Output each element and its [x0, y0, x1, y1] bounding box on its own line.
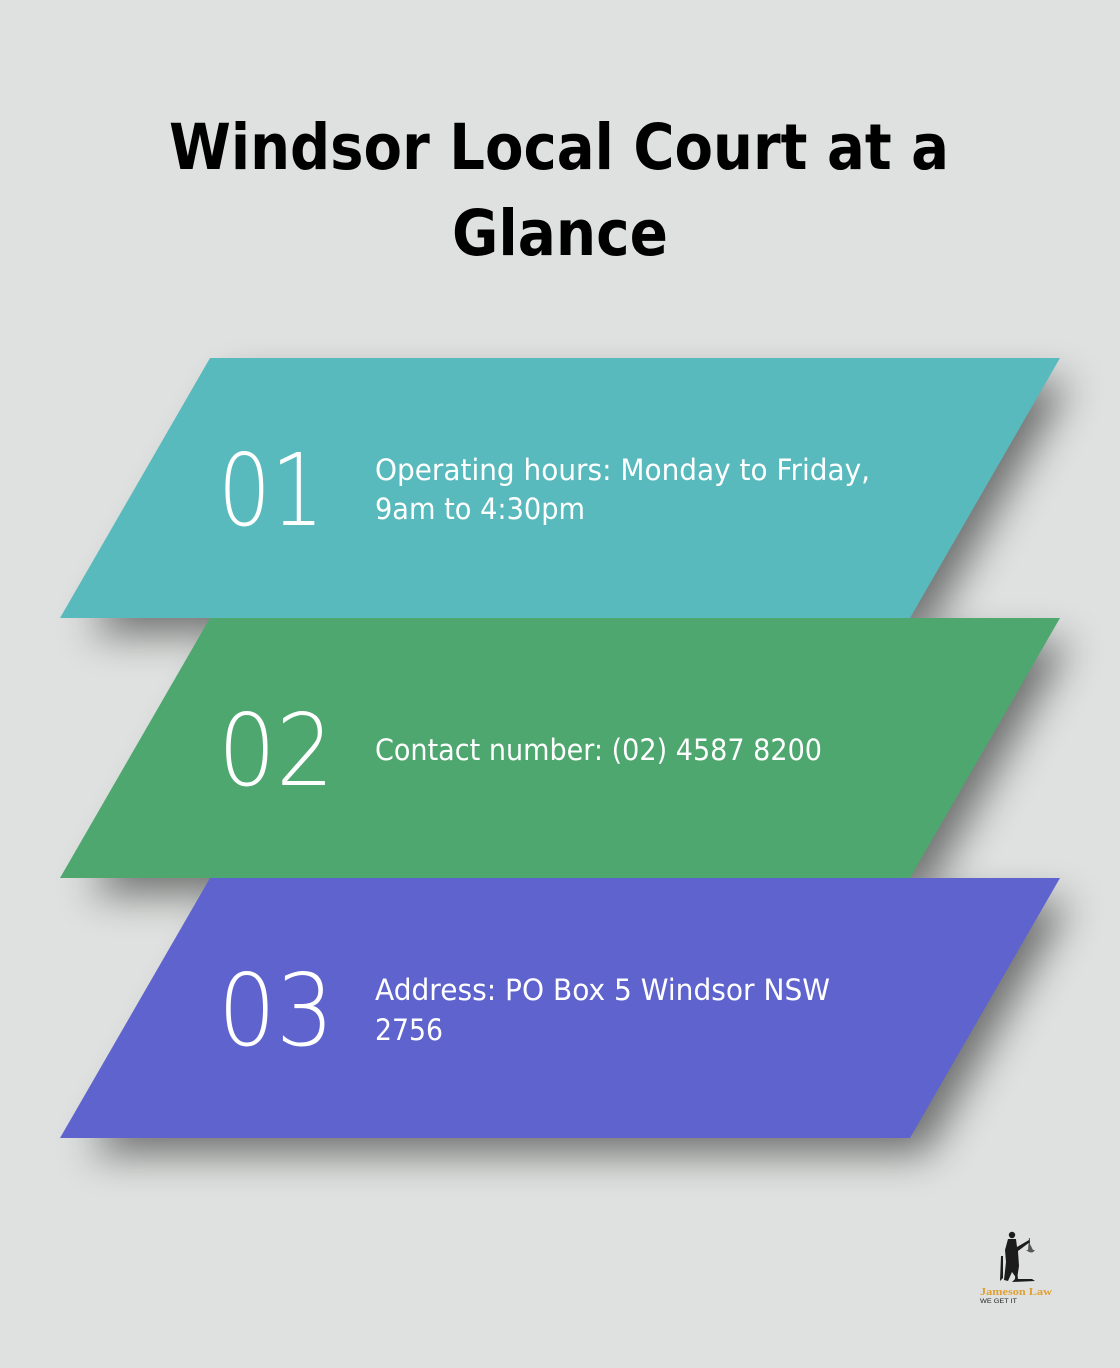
- title: Windsor Local Court at a: [169, 111, 949, 184]
- text: address: [375, 973, 830, 1047]
- text: operating hours: Operating hours: Monday to Friday,: [375, 453, 870, 487]
- number 03: 03: [218, 952, 334, 1069]
- panel: step 02 contact number: [60, 618, 1070, 894]
- title: Glance: [452, 197, 668, 270]
- logo: Jameson Law: [980, 1232, 1052, 1305]
- number 02: 02: [218, 692, 334, 809]
- logo tagline: WE GET IT: [980, 1298, 1017, 1305]
- icon: lady justice: [1000, 1232, 1035, 1282]
- text: contact number: Contact number: (02) 4587 8200: [375, 733, 822, 767]
- text: operating hours: 9am to 4:30pm: [375, 492, 585, 526]
- panel: step 01 operating hours: [60, 358, 1070, 634]
- text: address: 2756: [375, 1013, 443, 1047]
- text: address: Address: PO Box 5 Windsor NSW: [375, 973, 830, 1007]
- panel: step 03 address: [60, 878, 1070, 1154]
- title: [169, 111, 949, 270]
- logo name: Jameson Law: [980, 1287, 1052, 1298]
- text: operating hours: [375, 453, 870, 526]
- number 01: 01: [218, 432, 324, 549]
